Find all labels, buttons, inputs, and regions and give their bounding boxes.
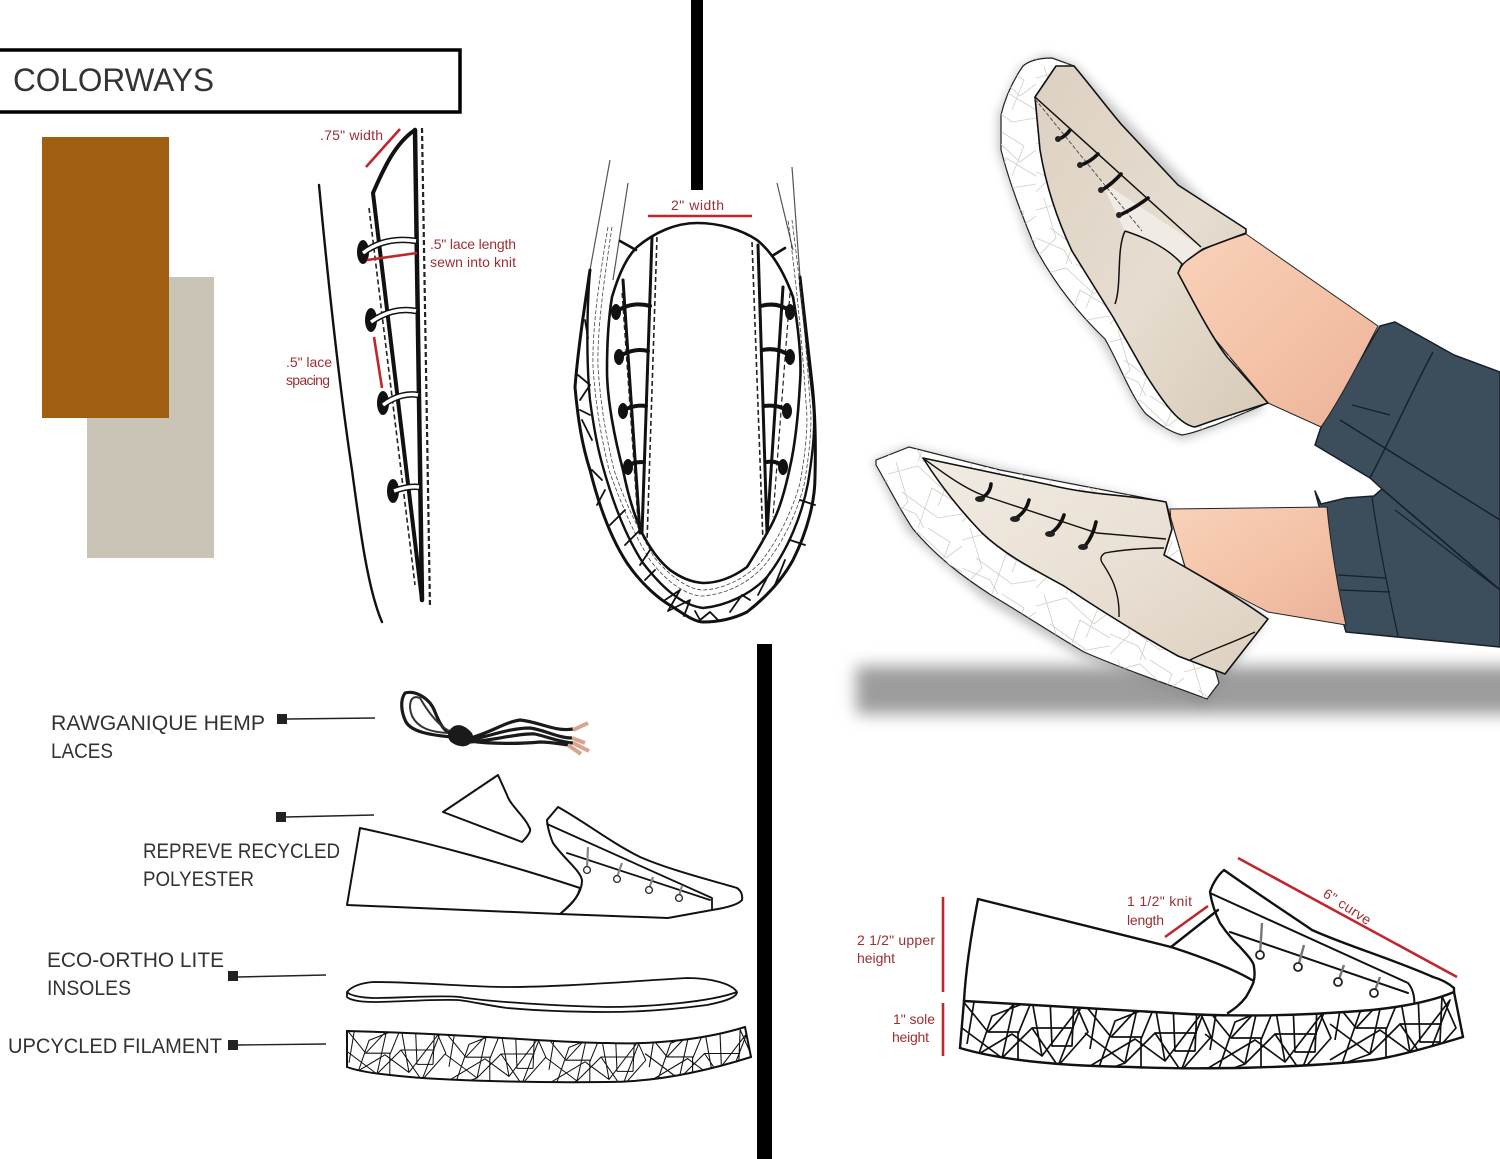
label: insoles: ECO-ORTHO LITE bbox=[47, 949, 224, 972]
exploded piece: front with laces bbox=[547, 807, 742, 918]
lace detail labels: spacing bbox=[286, 372, 330, 388]
shoe shadows bbox=[873, 55, 1265, 705]
leg skin lower bbox=[1164, 507, 1346, 625]
final shoe labels: 2 1/2" upper bbox=[857, 932, 935, 948]
upper body bbox=[1035, 66, 1268, 427]
material leader: filament bbox=[228, 1040, 326, 1050]
label: recycled polyester: REPREVE RECYCLED bbox=[143, 840, 340, 863]
red dimension lines bbox=[943, 858, 1457, 1056]
final shoe labels: length bbox=[1127, 912, 1164, 928]
lace detail labels: .75" width bbox=[320, 127, 383, 143]
lace detail labels: .5" lace bbox=[286, 354, 332, 370]
final shoe labels: 1 1/2" knit bbox=[1127, 893, 1192, 909]
final shoe with dimensions bbox=[943, 858, 1463, 1074]
colour swatches bbox=[42, 137, 214, 558]
final shoe labels: 6" curve bbox=[1320, 885, 1375, 928]
red width line bbox=[648, 215, 752, 217]
lace detail labels: .5" lace length bbox=[430, 236, 516, 252]
sole bbox=[1001, 58, 1268, 435]
front upper bbox=[1210, 870, 1454, 1013]
upper worn shoe bbox=[1001, 58, 1268, 435]
opening bbox=[607, 223, 801, 583]
material leader: hemp laces bbox=[277, 714, 375, 724]
material leader: insoles bbox=[228, 971, 326, 981]
knit length line bbox=[1171, 910, 1218, 947]
leg skin upper bbox=[1178, 234, 1378, 427]
lace detail labels bbox=[286, 127, 516, 388]
exploded piece: heel bbox=[347, 828, 580, 914]
icon: hemp laces bbox=[402, 692, 589, 754]
label: hemp laces bbox=[51, 712, 265, 763]
red dimension lines bbox=[366, 129, 417, 388]
lace panel bbox=[1100, 180, 1201, 264]
label: recycled polyester bbox=[143, 840, 340, 891]
exploded piece: collar triangle bbox=[443, 775, 530, 842]
heading: colorways: COLORWAYS bbox=[13, 62, 214, 98]
eyelets and laces: front view bbox=[611, 304, 795, 475]
label: recycled polyester: POLYESTER bbox=[143, 868, 254, 891]
final shoe labels: 1" sole bbox=[893, 1011, 935, 1027]
label: width: 2" width bbox=[671, 197, 724, 213]
lower worn shoe bbox=[876, 447, 1268, 699]
laces bbox=[981, 484, 1096, 546]
upper body bbox=[923, 458, 1268, 674]
heading: colorways bbox=[0, 50, 460, 112]
exploded piece: upcycled filament sole bbox=[345, 1026, 752, 1089]
final shoe labels: height bbox=[892, 1029, 929, 1045]
final shoe labels: height bbox=[857, 950, 895, 966]
material leader: recycled polyester bbox=[276, 812, 374, 822]
vertical divider bar: bottom bbox=[757, 644, 772, 1159]
vertical divider bar: top bbox=[691, 0, 703, 190]
eyelets bbox=[1055, 136, 1122, 218]
lace detail diagram bbox=[319, 128, 430, 622]
label: hemp laces: LACES bbox=[51, 740, 113, 763]
lower trouser leg bbox=[1315, 489, 1500, 647]
laces bbox=[1059, 130, 1148, 215]
eyelets bbox=[975, 496, 1088, 550]
filament sole bbox=[960, 992, 1463, 1074]
upper trouser leg bbox=[1315, 322, 1500, 590]
label: insoles bbox=[47, 949, 224, 1000]
sole bbox=[876, 447, 1219, 699]
pants bbox=[1315, 322, 1500, 647]
lace detail labels: sewn into knit bbox=[430, 254, 516, 270]
exploded piece: insole bbox=[347, 978, 737, 1012]
front view of shoe bbox=[575, 160, 815, 622]
eyelets and laces bbox=[357, 240, 419, 503]
shoe laces bbox=[1256, 923, 1380, 997]
label: upcycled filament: UPCYCLED FILAMENT bbox=[8, 1035, 222, 1058]
heel upper bbox=[964, 899, 1252, 1001]
filament band bbox=[578, 320, 815, 620]
label: insoles: INSOLES bbox=[47, 977, 131, 1000]
floor shadow band bbox=[856, 666, 1500, 714]
final shoe labels bbox=[857, 885, 1375, 1045]
label: hemp laces: RAWGANIQUE HEMP bbox=[51, 712, 265, 735]
